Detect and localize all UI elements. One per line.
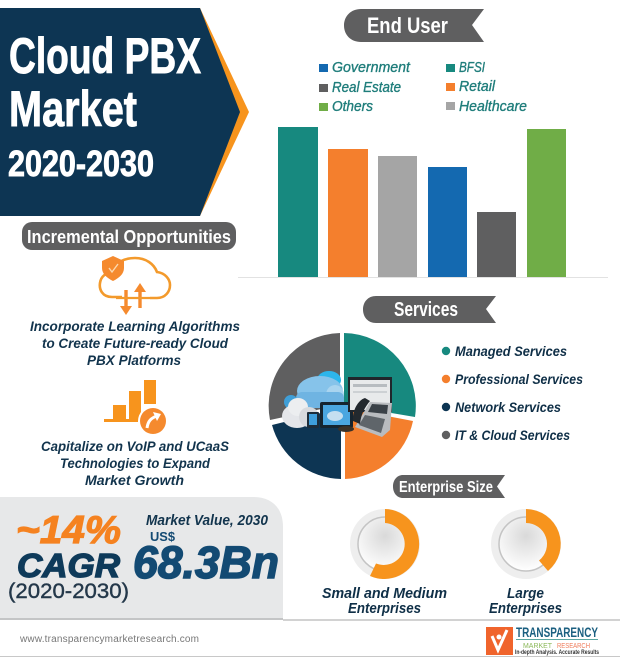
pie chart: services (269, 333, 416, 479)
text: incorporate learning algorithms: Incorporate Learning Algorithms (30, 318, 240, 334)
logo: Transparency Market Research: In-depth Analysis. Accurate Results (515, 650, 600, 656)
stat: CAGR label: CAGR (17, 547, 120, 584)
text: capitalize on VoIP and UCaaS: Market Growth (85, 472, 184, 488)
heading: Incremental Opportunities (22, 222, 236, 250)
ribbon heading: End User: End User (367, 13, 448, 38)
legend: end user: Others (332, 98, 373, 115)
stat: CAGR period: (2020-2030) (8, 580, 129, 603)
text: capitalize on VoIP and UCaaS: Capitalize on VoIP and UCaaS (41, 438, 230, 454)
logo: Transparency Market Research: MARKET (523, 643, 553, 650)
bar: Retail (328, 149, 368, 277)
ribbon heading: Enterprise Size: Enterprise Size (399, 479, 493, 496)
bar: Real Estate (477, 212, 516, 277)
stat: market value: 68.3Bn (133, 537, 279, 588)
stat: CAGR percentage: ~14% (16, 509, 121, 552)
legend: end user (319, 59, 527, 115)
ribbon heading: End User (344, 9, 484, 42)
footer website: www.transparencymarketresearch.com (19, 634, 199, 645)
legend item: IT and Cloud Services: IT & Cloud Services (455, 427, 570, 443)
label: large enterprises: Enterprises (489, 600, 562, 617)
bar: BFSI (278, 127, 318, 277)
slice: Network Services (272, 408, 341, 479)
donut chart: large enterprises (491, 509, 561, 579)
bar: Others (527, 129, 566, 277)
slice: Professional Services (345, 408, 413, 479)
label: market value 2030: Market Value, 2030 (146, 512, 269, 529)
bar: Healthcare (378, 156, 417, 277)
panel: CAGR and market value (0, 497, 283, 618)
text: incorporate learning algorithms: PBX Platforms (87, 352, 181, 368)
bar chart: end user (238, 127, 608, 278)
text: capitalize on VoIP and UCaaS (41, 438, 230, 488)
logo: Transparency Market Research: RESEARCH (557, 643, 590, 650)
text: capitalize on VoIP and UCaaS: Technologies to Expand (60, 455, 210, 471)
label: small and medium enterprises: Small and Medium (322, 585, 447, 602)
heading: Incremental Opportunities: Incremental Opportunities (27, 227, 231, 247)
title years: 2020-2030 (8, 143, 154, 184)
title banner (0, 8, 249, 216)
ribbon heading: Enterprise Size (393, 475, 505, 498)
slice: IT and Cloud Services (269, 333, 340, 420)
label: currency: US$ (150, 529, 176, 544)
legend: end user: Government (332, 59, 411, 76)
label: small and medium enterprises (322, 585, 447, 617)
title: Cloud PBX Market: Market (9, 81, 137, 137)
label: small and medium enterprises: Enterprises (348, 600, 421, 617)
text: incorporate learning algorithms: to Create Future-ready Cloud (42, 335, 228, 351)
title: Cloud PBX Market: Cloud PBX (9, 28, 201, 84)
label: large enterprises (489, 585, 562, 617)
legend item: Network Services: Network Services (455, 399, 561, 415)
slice: Managed Services (344, 333, 416, 417)
legend item: Professional Services: Professional Services (455, 371, 583, 387)
ribbon heading: Services (363, 296, 496, 323)
bar: Government (428, 167, 467, 277)
legend: end user: Real Estate (332, 79, 401, 96)
label: large enterprises: Large (507, 585, 544, 602)
legend: end user: Healthcare (459, 98, 527, 115)
text: incorporate learning algorithms (30, 318, 240, 368)
legend: end user: Retail (459, 78, 496, 95)
icon: rising bars with arrow badge (104, 380, 168, 436)
donut chart: small and medium enterprises (350, 509, 420, 579)
title: Cloud PBX Market (9, 28, 201, 137)
icon: cloud with shield and arrows (100, 256, 170, 315)
logo: Transparency Market Research (486, 624, 600, 656)
legend item: Managed Services: Managed Services (455, 343, 567, 359)
ribbon heading: Services: Services (394, 299, 458, 321)
legend: services (442, 343, 583, 443)
illustration: clouds and devices (282, 371, 392, 437)
legend: end user: BFSI (459, 59, 485, 76)
